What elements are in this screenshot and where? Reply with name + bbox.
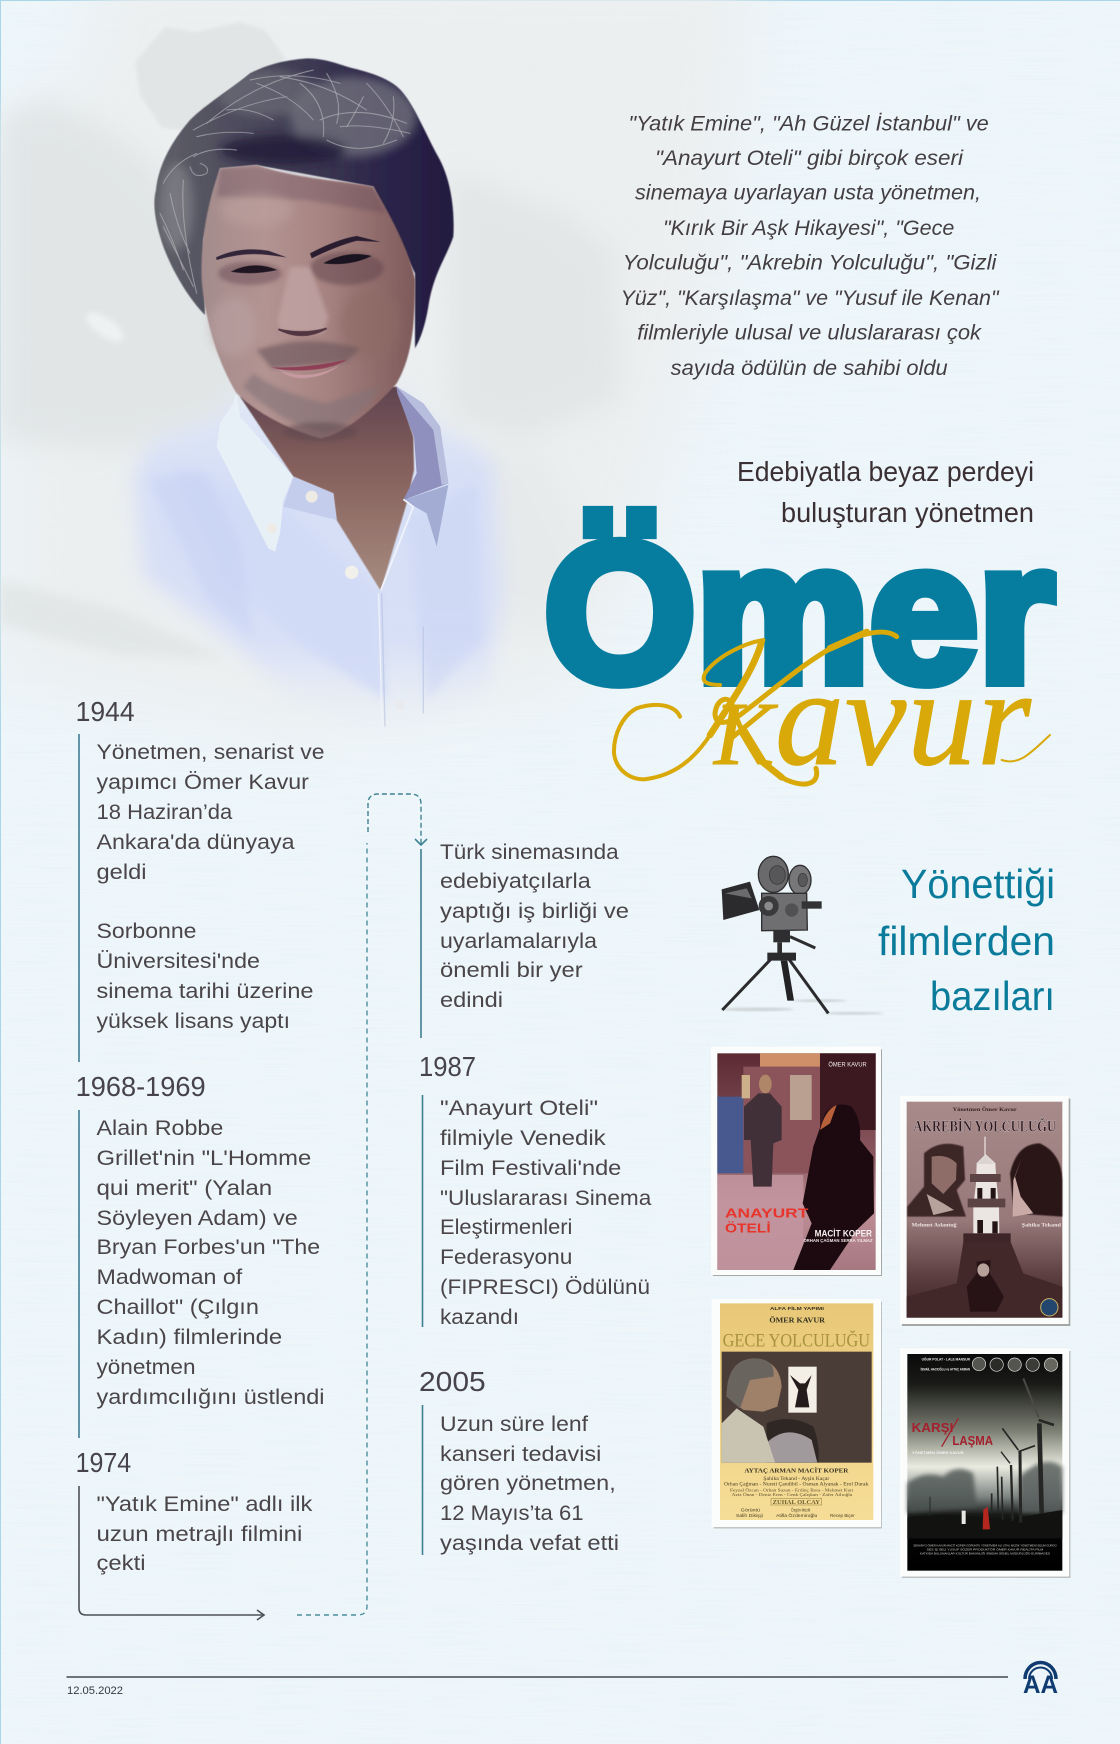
timeline connector bbox=[79, 794, 427, 1620]
poster: Akrebin Yolculuğu: Şahika Tekand bbox=[1022, 1224, 1062, 1229]
timeline left: 1968-1969: yönetmen bbox=[96, 1355, 196, 1379]
quote text: "Anayurt Oteli" gibi birçok eseri bbox=[655, 146, 964, 170]
icon: AA logo: AA bbox=[1023, 1671, 1058, 1699]
poster: Anayurt Oteli: MACİT KOPER bbox=[815, 1229, 872, 1239]
timeline right: 1987: "Anayurt Oteli" bbox=[440, 1096, 598, 1120]
poster: Karşılaşma: İSMAİL HACIOĞLU ve AYTAÇ ARMAN bbox=[921, 1367, 970, 1372]
portrait photo of Ömer Kavur bbox=[133, 58, 503, 743]
poster: Gece Yolculuğu: Özgün Müzik bbox=[791, 1508, 811, 1513]
timeline right: 1987: kazandı bbox=[440, 1305, 519, 1329]
poster: Gece Yolculuğu: Atilla Özdemiroğlu bbox=[776, 1513, 818, 1518]
facial features bbox=[210, 167, 400, 441]
timeline right: 1987 bbox=[419, 1051, 651, 1329]
poster: Karşılaşma: KATKIDA BULUNANLAR KÜLTÜR BAKANLIĞI SİNEMA GENEL MÜDÜRLÜĞÜ EURİMAGES bbox=[920, 1551, 1050, 1556]
timeline right: literature text: edindi bbox=[440, 988, 503, 1012]
timeline left: 1944: 1944 bbox=[76, 696, 135, 727]
poster: Akrebin Yolculuğu bbox=[900, 1096, 1070, 1326]
poster: Karşılaşma: KARŞI bbox=[912, 1420, 953, 1435]
poster: Akrebin Yolculuğu: Yönetmen Ömer Kavur bbox=[953, 1107, 1017, 1113]
timeline right: 2005: yaşında vefat etti bbox=[440, 1531, 619, 1555]
timeline right: 1987: Eleştirmenleri bbox=[440, 1215, 572, 1239]
title: Kavur in gold script: K bbox=[712, 685, 778, 784]
timeline left: 1944: Ankara'da dünyaya bbox=[96, 830, 295, 854]
title: Kavur in gold script: avur bbox=[775, 641, 1032, 794]
date: 12.05.2022 bbox=[67, 1685, 123, 1697]
watercolor stains behind the portrait bbox=[0, 0, 760, 740]
poster: Gece Yolculuğu: ÖMER KAVUR bbox=[769, 1316, 825, 1325]
timeline left: 1968-1969: Bryan Forbes'un "The bbox=[96, 1235, 320, 1259]
quote text: "Kırık Bir Aşk Hikayesi", "Gece bbox=[663, 216, 954, 240]
timeline right: 2005: 2005 bbox=[419, 1366, 486, 1397]
poster: Gece Yolculuğu: GECE YOLCULUĞU bbox=[723, 1330, 870, 1352]
subtitle: Edebiyatla beyaz perdeyi bbox=[737, 456, 1034, 487]
timeline left: 1968-1969: Kadın) filmlerinde bbox=[96, 1325, 282, 1349]
poster: Gece Yolculuğu: Salih Dikişçi bbox=[736, 1513, 763, 1518]
heading: Yönettiği filmlerden bazıları: bazıları bbox=[930, 973, 1055, 1019]
subtitle: buluşturan yönetmen bbox=[781, 497, 1034, 528]
timeline right: literature text: uyarlamalarıyla bbox=[440, 929, 597, 953]
timeline right: 1987: (FIPRESCI) Ödülünü bbox=[440, 1275, 650, 1299]
title: Kavur in gold script bbox=[614, 632, 1050, 794]
shirt bbox=[133, 387, 503, 743]
heading: Yönettiği filmlerden bazıları: Yönettiği bbox=[901, 861, 1055, 907]
timeline right: 2005: Uzun süre lenf bbox=[440, 1412, 588, 1436]
timeline left: 1968-1969: yardımcılığını üstlendi bbox=[96, 1385, 324, 1409]
timeline right: literature text: yaptığı iş birliği ve bbox=[440, 899, 629, 923]
poster: Gece Yolculuğu: AYTAÇ ARMAN MACİT KOPER bbox=[744, 1468, 849, 1475]
poster: Anayurt Oteli: ANAYURT bbox=[725, 1205, 808, 1220]
timeline left: 1968-1969: Söyleyen Adam) ve bbox=[96, 1206, 298, 1230]
quote text: sinemaya uyarlayan usta yönetmen, bbox=[635, 180, 981, 204]
grey hair shading bbox=[160, 70, 417, 250]
poster: Anayurt Oteli: ORHAN ÇAĞMAN SERRA YILMAZ bbox=[803, 1238, 873, 1243]
timeline left: 1944: Sorbonne bbox=[96, 919, 196, 943]
poster: Gece Yolculuğu: ALFA FİLM YAPIMI bbox=[770, 1305, 824, 1311]
quote text bbox=[621, 112, 1000, 380]
timeline right: 2005: 12 Mayıs’ta 61 bbox=[440, 1501, 584, 1525]
timeline left: 1974: uzun metrajlı filmini bbox=[96, 1522, 302, 1546]
poster: Karşılaşma: SENARYO ÖMER KAVUR-MACİT KOPER GÖRÜNTÜ YÖNETMENİ ALİ UTKU MÜZİK YÖNETMENİ SELİM GÜRGÜ bbox=[913, 1543, 1057, 1548]
grey hair streaks bbox=[160, 70, 410, 293]
poster: Anayurt Oteli: ÖMER KAVUR bbox=[828, 1061, 867, 1069]
timeline right: 2005: gören yönetmen, bbox=[440, 1471, 616, 1495]
timeline right: literature text: Türk sinemasında bbox=[440, 840, 619, 864]
timeline left: 1944: yüksek lisans yaptı bbox=[96, 1009, 290, 1033]
poster: Akrebin Yolculuğu: AKREBİN YOLCULUĞU bbox=[913, 1119, 1056, 1136]
timeline right: 2005: kanseri tedavisi bbox=[440, 1442, 601, 1466]
timeline right: 1987: Federasyonu bbox=[440, 1245, 572, 1269]
timeline right: 1987: filmiyle Venedik bbox=[440, 1126, 606, 1150]
timeline left: 1944: 18 Haziran’da bbox=[96, 800, 232, 824]
poster: Anayurt Oteli: ÖTELİ bbox=[725, 1220, 771, 1235]
poster: Gece Yolculuğu: Görüntü bbox=[741, 1508, 761, 1513]
poster: Karşılaşma: SES İŞ SELİ YUSUF SÖZER PRODÜKTÖR ÖMER KAVUR REALİTA FİLM bbox=[927, 1546, 1044, 1551]
timeline left: 1944: Yönetmen, senarist ve bbox=[96, 740, 324, 764]
poster: Anayurt Oteli bbox=[711, 1047, 882, 1276]
quote text: sayıda ödülün de sahibi oldu bbox=[671, 356, 948, 380]
poster: Akrebin Yolculuğu: Mehmet Aslantuğ bbox=[912, 1224, 958, 1229]
poster: Gece Yolculuğu: Aziz Önan - Deniz Eren - Cenk Çalışkan - Zafer Atlıoğlu bbox=[732, 1492, 852, 1497]
timeline left: 1968-1969: Alain Robbe bbox=[96, 1116, 223, 1140]
poster: Karşılaşma bbox=[900, 1348, 1070, 1578]
timeline right: 2005 bbox=[419, 1366, 619, 1555]
poster: Karşılaşma: LAŞMA bbox=[952, 1433, 993, 1448]
timeline right: 1987: Film Festivali'nde bbox=[440, 1156, 621, 1180]
timeline left: 1974: çekti bbox=[96, 1551, 146, 1575]
icon: film camera on tripod bbox=[720, 856, 883, 1015]
timeline right: literature text bbox=[421, 840, 629, 1038]
timeline left: 1968-1969 bbox=[76, 1071, 324, 1438]
timeline right: literature text: edebiyatçılarla bbox=[440, 869, 591, 893]
poster: Gece Yolculuğu: Orhan Çağman - Nureti Çandibil - Osman Alyanak - Erol Durak bbox=[724, 1482, 869, 1487]
timeline left: 1974: "Yatık Emine" adlı ilk bbox=[96, 1492, 313, 1516]
timeline left: 1944: Üniversitesi'nde bbox=[96, 949, 260, 973]
collar bbox=[217, 387, 448, 710]
timeline right: 1987: "Uluslararası Sinema bbox=[440, 1186, 651, 1210]
timeline left: 1968-1969: 1968-1969 bbox=[76, 1071, 206, 1102]
timeline left: 1944 bbox=[76, 696, 324, 1062]
timeline right: literature text: önemli bir yer bbox=[440, 958, 583, 982]
neck bbox=[240, 387, 414, 591]
poster: Gece Yolculuğu: Feyzal Özcan - Orhan Suzan - Erdinç Bora - Mehmet Kurt bbox=[730, 1487, 854, 1492]
poster: Gece Yolculuğu: ZUHAL OLCAY bbox=[773, 1500, 821, 1506]
timeline left: 1944: sinema tarihi üzerine bbox=[96, 979, 314, 1003]
timeline left: 1968-1969: Chaillot" (Çılgın bbox=[96, 1295, 259, 1319]
timeline left: 1944: geldi bbox=[96, 860, 146, 884]
timeline left: 1944: yapımcı Ömer Kavur bbox=[96, 770, 309, 794]
poster: Karşılaşma: YÖNETMEN ÖMER KAVUR bbox=[912, 1450, 964, 1455]
poster: Gece Yolculuğu bbox=[712, 1299, 882, 1528]
timeline left: 1974: 1974 bbox=[76, 1447, 131, 1478]
timeline left: 1974 bbox=[76, 1447, 313, 1575]
poster: Karşılaşma: UĞUR POLAT - LALE MANSUR bbox=[922, 1357, 970, 1362]
quote text: "Yatık Emine", "Ah Güzel İstanbul" ve bbox=[628, 112, 989, 136]
timeline left: 1968-1969: qui merit" (Yalan bbox=[96, 1176, 272, 1200]
timeline left: 1968-1969: Madwoman of bbox=[96, 1265, 242, 1289]
poster: Gece Yolculuğu: Şahika Tekand - Ayşin Kaçar bbox=[763, 1477, 830, 1482]
face bbox=[201, 165, 415, 438]
timeline right: 1987: 1987 bbox=[419, 1051, 476, 1082]
quote text: filmleriyle ulusal ve uluslararası çok bbox=[637, 320, 982, 344]
quote text: Yolculuğu", "Akrebin Yolculuğu", "Gizli bbox=[623, 250, 998, 274]
heading: Yönettiği filmlerden bazıları: filmlerden bbox=[878, 918, 1055, 964]
quote text: Yüz", "Karşılaşma" ve "Yusuf ile Kenan" bbox=[621, 286, 1000, 310]
timeline left: 1968-1969: Grillet'nin "L'Homme bbox=[96, 1146, 311, 1170]
hair bbox=[154, 58, 454, 348]
footer rule bbox=[66, 1676, 1008, 1678]
heading: Yönettiği filmlerden bazıları bbox=[878, 861, 1055, 1019]
subtitle bbox=[737, 456, 1034, 528]
title: Ömer: Ömer bbox=[544, 502, 1054, 723]
poster: Gece Yolculuğu: Recep Biçer bbox=[830, 1513, 855, 1518]
